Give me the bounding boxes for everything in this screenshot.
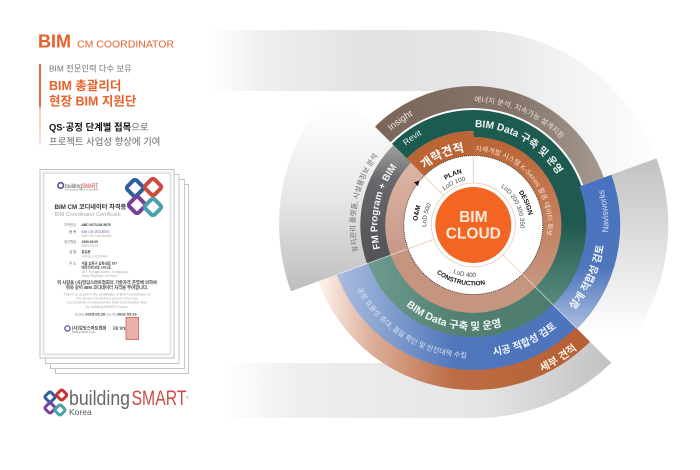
certificate statement: the above mentioned person who has	[76, 297, 138, 301]
certificate fields: 성 명 :	[69, 249, 78, 254]
ring labels: bottom: BIM Data 구축 및 운영	[406, 300, 501, 331]
title: BIM	[38, 32, 71, 52]
ring labels: bottom	[357, 287, 577, 370]
ring labels: bottom: 시공 적합성 검토	[494, 322, 556, 356]
certificate header logo	[58, 183, 98, 191]
stage: O&M: LoD 500	[422, 203, 431, 226]
certificate statement	[57, 279, 157, 309]
ring: k-series section	[473, 137, 561, 287]
certificate header logo: building	[65, 183, 82, 190]
ring labels: top	[388, 96, 565, 236]
ring labels: top: 자체개발 시스템 K-Series 활용 데이터 확보	[476, 146, 554, 236]
certificate issuer and stamp: (사)빌딩스마트협회	[72, 324, 107, 332]
ring labels: left	[349, 153, 396, 252]
ring labels: right: Navisworks	[599, 190, 608, 232]
center circle: BIM cloud: CLOUD	[446, 226, 501, 242]
ring labels: top: Revit	[402, 130, 422, 146]
certificate issuer and stamp	[65, 318, 138, 340]
certificate fields: ABC 0071234 5678	[82, 223, 111, 227]
certificate fields: 종 목 :	[69, 230, 78, 234]
certificate statement: successfully completed the BIM Coordinator Test	[67, 301, 147, 305]
certificate dates: 발급일자 2025.05.26 유효기간 2026.05.26	[75, 312, 137, 316]
title: CM COORDINATOR	[77, 38, 174, 50]
ring labels: bottom: 세부 견적	[540, 343, 577, 370]
ring labels: bottom: 공정 효율성 증대, 품질 확인 및 안전대책 수립	[357, 287, 466, 358]
title	[38, 32, 174, 52]
certificate header logo: SMART	[82, 183, 98, 190]
ring labels: left: FM Program + BIM	[370, 164, 396, 250]
stage: construction: LoD 400	[454, 269, 476, 277]
certificate fields: 1999.09.09	[82, 240, 98, 244]
ring: detailed estimate band	[318, 274, 590, 390]
background sweep: top band	[210, 30, 656, 178]
ring: BIM data bottom band	[367, 255, 553, 338]
stage: construction: CONSTRUCTION	[438, 270, 485, 286]
certificate statement: 위와 같이 BIM 코디네이터 자격을 부여합니다.	[66, 284, 148, 291]
background sweep: bottom band	[223, 342, 611, 418]
ring labels: left: 유지관리 플랫폼, 시설물정보 분석	[349, 153, 378, 252]
certificate statement: 위 사람을 (사)빌딩스마트협회의 기술자격 운영에 의하여	[57, 279, 157, 286]
logo: buildingSMART Korea: SMART	[132, 387, 187, 410]
logo: buildingSMART Korea: ®	[186, 395, 189, 400]
certificate header logo: International Home of openBIM	[65, 188, 98, 191]
background sweep: right arc	[577, 158, 668, 363]
stage dividers	[338, 156, 576, 328]
certificate fields: BIM CM 코디네이터	[82, 229, 110, 234]
certificate fields: 1999.09.09	[82, 244, 98, 248]
certificate title: BIM CM 코디네이터 자격증	[54, 203, 126, 211]
background sweep: left arc	[279, 87, 393, 291]
ring: rough estimate section	[407, 131, 473, 176]
certificate stack	[40, 170, 188, 374]
ring labels: top: 개략견적	[420, 142, 464, 168]
text block: summary: BIM 전문인력 다수 보유	[49, 64, 132, 74]
ring labels: top: Insight	[388, 110, 413, 130]
certificate fields: HONG GILDONG	[82, 254, 108, 258]
text block: summary: BIM 총괄리더	[49, 79, 121, 93]
center circle: BIM cloud: BIM	[459, 209, 488, 226]
stage: design: DESIGN	[518, 190, 533, 215]
stage: O&M: O&M	[413, 205, 420, 220]
certificate statement: by buildingSMART Korea.	[86, 305, 128, 309]
certificate title	[54, 203, 126, 218]
certificate issuer and stamp: buildingSMART Korea	[72, 331, 96, 334]
ring labels: right: 설계 적합성 검토	[569, 245, 604, 310]
logo: buildingSMART Korea	[44, 387, 189, 417]
certificate fields: 홍길동	[82, 249, 91, 254]
icon: certificate knot	[126, 178, 162, 216]
ring: FM program band	[360, 145, 412, 264]
ring: design review band	[553, 175, 620, 329]
text block: summary	[39, 64, 160, 147]
certificate fields: 서울 송파구 송파대로 167	[82, 260, 117, 266]
ring labels: top: 에너지 분석, 지속가능 설계지원	[474, 96, 565, 138]
certificate fields	[64, 222, 129, 278]
certificate fields: 자격번호 :	[64, 222, 78, 227]
ring: salmon O&M section	[385, 163, 424, 255]
ring: Insight band	[375, 86, 604, 185]
certificate statement: This is to present the certificate of BIM Coordinator to	[63, 292, 151, 296]
ring labels: top: BIM Data 구축 및 운영	[476, 120, 564, 174]
stage: plan	[442, 168, 465, 190]
stage: design: LoD 200 300 350	[501, 184, 525, 228]
certificate fields: 생년월일 :	[64, 239, 78, 244]
certificate fields: Seoul Republic of Korea	[82, 274, 117, 278]
certificate fields: BIM CM Coordinator	[82, 234, 112, 238]
stage: plan: LoD 100	[442, 176, 465, 190]
text block: summary: QS·공정 단계별 접목으로	[49, 122, 149, 132]
arrow: cycle direction	[414, 181, 419, 186]
certificate title: BIM Coordinator Certificate	[54, 212, 121, 218]
BIM cloud diagram	[238, 30, 668, 418]
ring: BIM data top band	[392, 110, 588, 306]
text block: summary: 프로젝트 사업성 향상에 기여	[49, 136, 160, 147]
stage: plan: PLAN	[444, 168, 462, 180]
certificate fields: 167, Songpa-daero, Songpa-gu,	[82, 270, 129, 274]
stage: O&M	[413, 203, 431, 226]
logo: buildingSMART Korea: Korea	[69, 407, 92, 417]
text block: summary: 현장 BIM 지원단	[49, 94, 137, 108]
icon: buildingSMART knot	[44, 389, 67, 416]
certificate issuer and stamp: 회장 연태성	[113, 326, 128, 330]
white stage disc	[404, 156, 543, 294]
certificate fields: 주 소 :	[69, 262, 78, 266]
center circle: BIM cloud	[435, 187, 511, 263]
ring: construction review band	[337, 263, 576, 370]
certificate fields: 테라타워 B동 1411호	[82, 264, 111, 270]
ring: salmon inner	[385, 137, 561, 313]
ring labels: right	[569, 190, 608, 310]
logo: buildingSMART Korea: building	[69, 388, 130, 410]
